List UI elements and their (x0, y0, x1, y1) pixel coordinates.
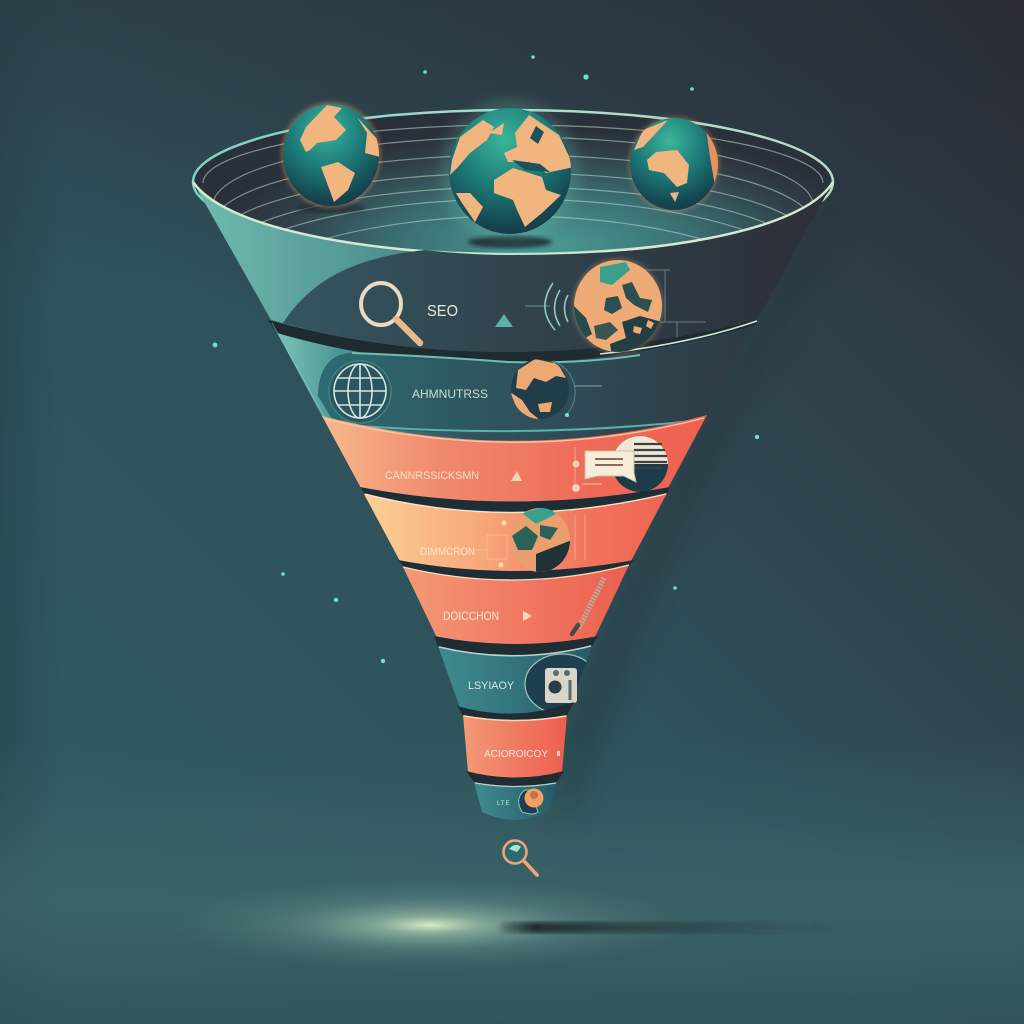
label: LTE (497, 801, 511, 807)
icon: small triangle (511, 471, 522, 481)
segment 3: consideration (322, 415, 707, 503)
globe 2: Africa and Europe (440, 99, 580, 248)
Consideration label: CANNRSSICKSMN (385, 470, 479, 482)
icon: wire globe (329, 361, 391, 423)
decorative callout lines (640, 270, 706, 338)
globe 7: decision globe (510, 506, 572, 574)
inner panel (318, 338, 740, 434)
globe 1: Americas (281, 102, 381, 213)
faint boxes (475, 515, 585, 560)
icon: chat bubble badge (585, 436, 668, 492)
dark inner panel (283, 250, 641, 352)
globe 3: Africa side (628, 116, 720, 212)
icon: magnifying glass (361, 283, 420, 343)
mini badge (519, 788, 544, 814)
segment 6: teal with badge (434, 636, 599, 714)
segment 5: Decision (398, 560, 634, 645)
globe 5: small globe (510, 359, 575, 420)
segment 7: Advocacy (457, 702, 574, 778)
segment 1: SEO (193, 182, 833, 352)
badge (524, 653, 586, 710)
label: ACIOROICOY (484, 748, 548, 760)
label: DOICCHON (443, 609, 499, 623)
icon: pencil (572, 578, 604, 634)
sparkle particles (213, 55, 759, 663)
icon: bottom magnifying glass (504, 840, 537, 875)
label: LSYIAOY (468, 680, 515, 692)
segment 4: decision band (360, 487, 670, 572)
globe 4: mottled orange (572, 258, 664, 356)
SEO label: SEO (427, 303, 458, 320)
icon: play triangle (523, 611, 532, 621)
Awareness label: AHMNUTRSS (412, 387, 488, 401)
funnel top rim and inside (192, 108, 834, 254)
icon: document picture (545, 668, 577, 703)
callout line (575, 385, 602, 387)
icon: teal triangle (495, 314, 513, 327)
segment 8: bottom tip (466, 771, 564, 820)
segment 2: awareness (268, 320, 757, 442)
icon: signal arcs (525, 283, 568, 330)
Decision label: DIMMCRON (420, 546, 475, 558)
connector nodes (572, 447, 602, 492)
